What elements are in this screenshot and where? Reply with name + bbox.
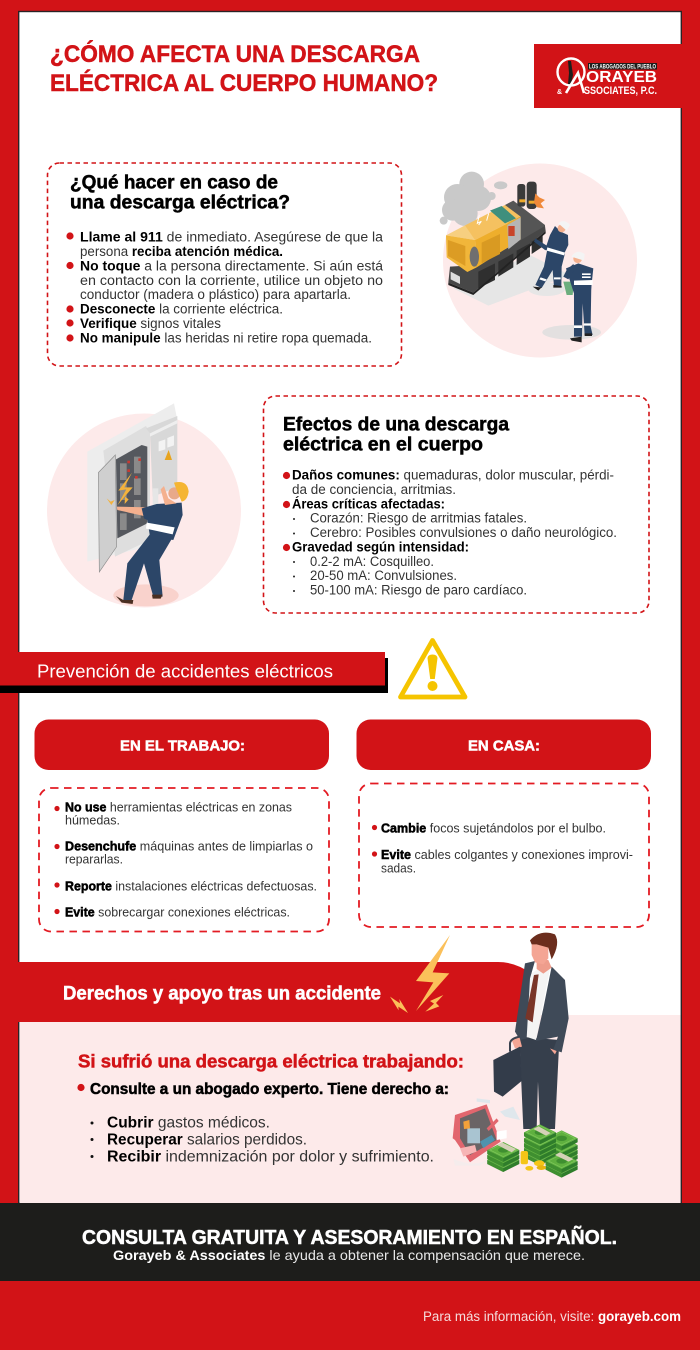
band: consulta gratuita: Gorayeb & Associates le ayuda a obtener la compensación que merece.	[113, 1247, 585, 1263]
panel: casa list	[359, 784, 649, 927]
list: derechos: Recuperar salarios perdidos.	[107, 1132, 307, 1148]
list: efectos: 50-100 mA: Riesgo de paro cardíaco.	[310, 582, 527, 598]
illustration: electrician at panel	[47, 403, 241, 608]
button: en el trabajo: EN EL TRABAJO:	[120, 738, 245, 754]
logo	[534, 44, 683, 108]
list: qué hacer: No toque a la persona directamente. Si aún está	[80, 258, 384, 274]
list: qué hacer	[66, 230, 384, 346]
heading: qué hacer: ¿Qué hacer en caso de	[70, 172, 278, 194]
button: en casa	[356, 720, 651, 770]
heading: qué hacer: una descarga eléctrica?	[70, 192, 290, 214]
icon: lightning bolts	[390, 935, 450, 1013]
list: efectos: Corazón: Riesgo de arritmias fatales.	[310, 510, 527, 526]
list: efectos: Gravedad según intensidad:	[292, 540, 469, 554]
list: qué hacer: No manipule las heridas ni retire ropa quemada.	[80, 330, 372, 346]
list: derechos	[90, 1114, 434, 1166]
panel: qué hacer	[48, 163, 402, 366]
heading: efectos: Efectos de una descarga	[283, 414, 509, 436]
logo: ORAYEB	[586, 69, 657, 86]
panel: trabajo list: repararlas.	[65, 852, 123, 866]
heading: derechos: Derechos y apoyo tras un accidente	[63, 984, 381, 1004]
panel: efectos	[264, 396, 649, 613]
logo: &	[557, 89, 562, 96]
panel: trabajo list: Evite sobrecargar conexiones eléctricas.	[65, 904, 290, 920]
icon: first aid kit	[453, 1098, 520, 1166]
heading: efectos: eléctrica en el cuerpo	[283, 434, 483, 456]
panel: trabajo list: Reporte instalaciones eléctricas defectuosas.	[65, 878, 317, 894]
illustration: businessman with money and first aid kit	[453, 933, 578, 1178]
list: efectos: Cerebro: Posibles convulsiones o daño neurológico.	[310, 525, 617, 540]
panel: casa list: sadas.	[381, 860, 416, 876]
button: en casa: EN CASA:	[468, 738, 540, 754]
heading: efectos	[283, 414, 509, 456]
list: qué hacer: conductor (madera o plástico) para apartarla.	[80, 287, 351, 302]
title: ¿CÓMO AFECTA UNA DESCARGA	[50, 40, 420, 68]
list: qué hacer: persona reciba atención médica.	[80, 244, 283, 259]
list: qué hacer: Desconecte la corriente eléctrica.	[80, 302, 283, 316]
banner: prevención: Prevención de accidentes eléctricos	[37, 660, 333, 682]
title: ELÉCTRICA AL CUERPO HUMANO?	[50, 69, 438, 97]
panel: trabajo list: Desenchufe máquinas antes de limpiarlas o	[65, 838, 313, 854]
list: qué hacer: en contacto con la corriente, utilice un objeto no	[80, 273, 383, 288]
list: efectos: Daños comunes: quemaduras, dolor muscular, pérdi-	[292, 468, 614, 482]
heading: si sufrió: Si sufrió una descarga eléctrica trabajando:	[78, 1050, 464, 1072]
panel: casa list: Evite cables colgantes y conexiones improvi-	[381, 847, 633, 862]
footer link: Para más información, visite: gorayeb.com	[423, 1309, 681, 1324]
band: consulta gratuita: CONSULTA GRATUITA Y ASESORAMIENTO EN ESPAÑOL.	[82, 1226, 617, 1249]
icon: money stacks	[487, 1124, 578, 1178]
panel: trabajo list: No use herramientas eléctricas en zonas	[65, 800, 292, 814]
list: efectos	[283, 468, 617, 598]
heading: qué hacer	[70, 172, 290, 214]
icon: warning triangle	[400, 640, 465, 697]
panel: casa list: Cambie focos sujetándolos por el bulbo.	[381, 820, 606, 836]
list: efectos: da de conciencia, arritmias.	[292, 482, 456, 497]
list: efectos: 20-50 mA: Convulsiones.	[310, 568, 457, 583]
button: en el trabajo	[34, 720, 329, 770]
list: efectos: Áreas críticas afectadas:	[292, 496, 445, 512]
illustration: workers and smoking machine	[440, 164, 637, 358]
logo: LOS ABOGADOS DEL PUEBLO	[589, 64, 656, 70]
list: qué hacer: Verifique signos vitales	[80, 316, 221, 331]
logo: SSOCIATES, P.C.	[584, 85, 657, 97]
title	[50, 40, 438, 97]
text: consulte: Consulte a un abogado experto. Tiene derecho a:	[90, 1081, 449, 1098]
band: consulta gratuita	[0, 1203, 700, 1281]
list: derechos: Cubrir gastos médicos.	[107, 1114, 270, 1132]
panel: trabajo list: húmedas.	[65, 812, 120, 828]
panel: derechos y apoyo	[0, 962, 680, 1203]
banner: prevención	[0, 652, 388, 693]
list: efectos: 0.2-2 mA: Cosquilleo.	[310, 554, 434, 569]
panel: trabajo list	[39, 788, 329, 932]
list: qué hacer: Llame al 911 de inmediato. Asegúrese de que la	[80, 230, 384, 244]
list: derechos: Recibir indemnización por dolor y sufrimiento.	[107, 1148, 434, 1166]
